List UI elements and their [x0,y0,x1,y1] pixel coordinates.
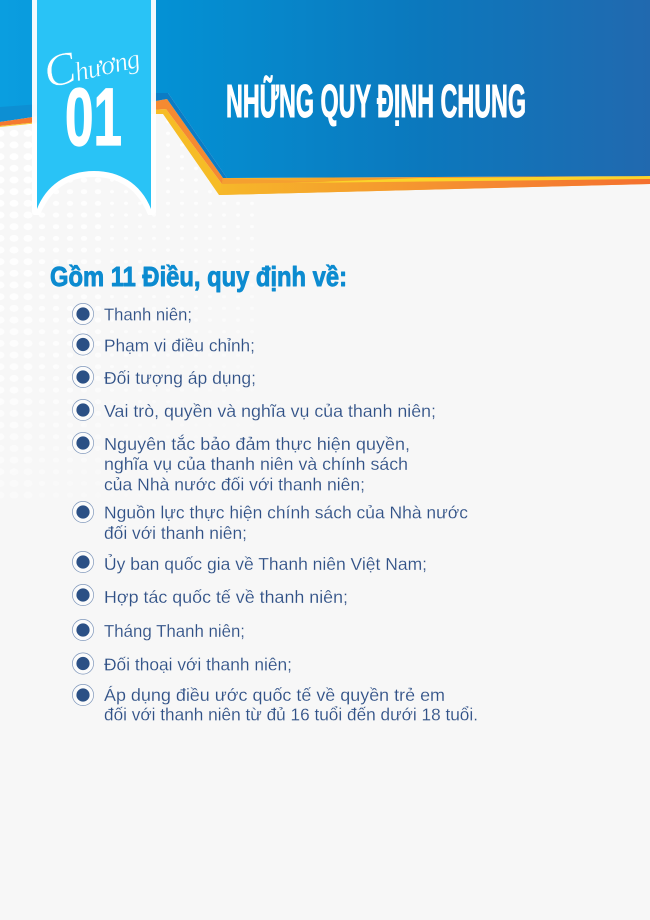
item 2: Phạm vi điều chỉnh; [104,336,255,356]
item 1: Thanh niên; [104,304,192,324]
item 1 [72,303,192,325]
bullet list [72,303,478,724]
thin yellow highlight [290,176,650,183]
item 6: Nguồn lực thực hiện chính sách của Nhà nước [104,502,468,522]
script label: Chương: Chương [39,26,144,98]
item 5: nghĩa vụ của thanh niên và chính sách [104,454,408,474]
dotted background pattern [0,120,255,500]
item 11 [72,684,478,724]
item 9: Tháng Thanh niên; [104,621,245,641]
item 8: Hợp tác quốc tế về thanh niên; [104,587,348,607]
slanted yellow band [150,109,650,195]
item 6 [72,501,468,543]
item 5 [72,432,410,494]
left banner segment [0,0,40,122]
slanted orange band [150,99,223,184]
item 11: đối với thanh niên từ đủ 16 tuổi đến dưới 18 tuổi. [104,704,478,724]
item 3: Đối tượng áp dụng; [104,368,256,388]
item 5: Nguyên tắc bảo đảm thực hiện quyền, [104,433,410,454]
item 7: Ủy ban quốc gia về Thanh niên Việt Nam; [104,553,427,574]
item 11: Áp dụng điều ước quốc tế về quyền trẻ em [104,685,445,705]
section heading: Gồm 11 Điều, quy định về: [50,261,347,292]
main blue area [150,0,650,178]
item 4: Vai trò, quyền và nghĩa vụ của thanh niên; [104,401,436,421]
chapter number: 01 [65,72,122,163]
item 6: đối với thanh niên; [104,523,247,543]
item 5: của Nhà nước đối với thanh niên; [104,474,365,494]
item 10: Đối thoại với thanh niên; [104,654,292,674]
lower orange band [219,176,650,195]
ribbon: chapter 01 [32,0,156,215]
header banner [0,0,650,195]
